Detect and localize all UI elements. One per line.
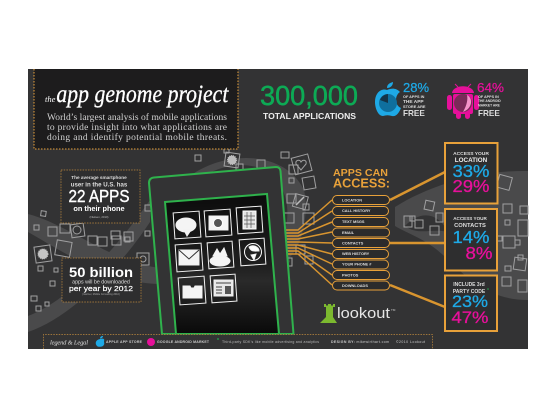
stat box: third party code: PARTY CODE — [453, 289, 486, 295]
heading: apps can access — [333, 167, 390, 190]
stat box: contacts: 8% — [466, 243, 492, 263]
callout: 50 billion — [62, 258, 141, 302]
stat: apple app store free: THE APP — [403, 99, 424, 105]
stat box: third party code — [445, 276, 497, 331]
callout: 22 apps: The average smartphone — [71, 175, 127, 180]
heading: apps can access: APPS CAN — [333, 167, 388, 179]
heading: apps can access: ACCESS: — [333, 176, 390, 190]
callout: 50 billion: 50 billion — [69, 264, 133, 280]
app icon grid — [173, 206, 266, 305]
stat box: location: LOCATION — [455, 157, 488, 164]
icon: folder — [178, 276, 206, 305]
callout: 22 apps — [61, 170, 140, 223]
stat box: contacts: ACCESS YOUR — [453, 216, 487, 221]
stat: apple app store free: 28% — [403, 81, 429, 95]
stat: total applications: 300,000 — [260, 80, 358, 111]
stat: apple app store free — [375, 81, 429, 118]
callout: 50 billion: per year by 2012 — [69, 284, 133, 293]
access list labels — [342, 198, 372, 288]
callout: 22 apps: on their phone — [73, 204, 125, 213]
footer: legend and legal: Third-party SDK’s like mobile advertising and analytics — [222, 340, 319, 344]
intro text — [47, 112, 227, 143]
stat: total applications: TOTAL APPLICATIONS — [263, 112, 357, 121]
stat box: location: ACCESS YOUR — [453, 151, 489, 157]
access list pills — [332, 196, 390, 290]
stat: android market free: FREE — [478, 109, 500, 118]
footer: legend and legal: GOOGLE ANDROID MARKET — [157, 340, 210, 344]
icon: mail — [175, 243, 203, 272]
callout: 50 billion: apps will be downloaded — [72, 280, 130, 286]
stat box: third party code: INCLUDE 3rd — [453, 282, 485, 288]
background: band cutout — [405, 215, 448, 232]
footer: legend and legal: APPLE APP STORE — [106, 340, 143, 344]
access list labels: CONTACTS — [342, 240, 364, 246]
callout: 50 billion: (Gartner, Mobile Consulting 2010) — [82, 293, 120, 296]
connectors: list to stat boxes — [390, 172, 445, 307]
access list labels: WEB HISTORY — [342, 251, 370, 256]
stat: android market free: THE ANDROID — [478, 99, 501, 103]
access list labels: PHOTOS — [342, 272, 359, 278]
intro text: doing and identify potential mobile threats. — [47, 132, 227, 143]
footer: legend and legal: legend & Legal — [50, 340, 88, 346]
icon: calculator — [236, 206, 263, 234]
stat box: location — [445, 143, 498, 204]
icon: legend android — [147, 338, 155, 346]
stat: android market free: 64% — [477, 81, 504, 95]
access list labels: EMAIL — [342, 230, 355, 235]
phone — [149, 167, 294, 334]
logo: lookout — [320, 304, 396, 323]
footer: legend and legal: ©2010 Lookout — [396, 340, 425, 344]
icon: chat — [173, 211, 201, 239]
stat box: third party code: 23% — [452, 292, 488, 311]
stat box: location: 29% — [452, 176, 490, 196]
stat: apple app store free: STORE ARE — [403, 104, 426, 109]
icon: newspaper — [210, 274, 237, 303]
footer: legend and legal — [44, 334, 432, 349]
access list labels: DOWNLOADS — [342, 283, 368, 288]
icon: tower — [320, 304, 337, 323]
logo: lookout: TM — [391, 308, 396, 312]
callout: 22 apps: 22 APPS — [68, 186, 130, 206]
icon: android — [447, 84, 479, 119]
access list labels: LOCATION — [342, 198, 362, 202]
icon: weather — [207, 241, 234, 269]
icon: globe — [239, 238, 266, 266]
stat box: location: 33% — [452, 161, 490, 181]
callout: 22 apps: user in the U.S. has — [71, 182, 128, 188]
footer: legend and legal: DESIGN BY: mikewirthart.com — [331, 340, 389, 344]
stat box: contacts: 14% — [452, 227, 490, 247]
stat: android market free — [447, 81, 504, 119]
access list labels: CALL HISTORY — [342, 208, 371, 213]
phone screen — [165, 194, 279, 334]
access list labels: YOUR PHONE # — [342, 262, 372, 266]
stat: android market free: MARKET ARE — [478, 104, 501, 108]
access list labels: TEXT MSGS — [342, 219, 365, 224]
title: theapp genome project — [45, 79, 229, 108]
logo: lookout: lookout — [337, 306, 390, 322]
stat box: contacts — [445, 209, 497, 270]
stat: apple app store free: OF APPS IN — [403, 95, 425, 99]
intro text: World’s largest analysis of mobile applications — [47, 112, 227, 123]
intro text: to provide insight into what applications are — [47, 123, 227, 133]
icon: legend apple — [96, 336, 104, 347]
stat box: third party code: 47% — [452, 308, 488, 327]
callout: 22 apps: (Nielsen, 2010) — [90, 215, 109, 219]
panel: title box — [34, 69, 238, 149]
background: DNA helix bands — [28, 158, 528, 332]
stat: android market free: OF APPS IN — [478, 95, 499, 99]
icon: apple — [375, 82, 401, 116]
stat: apple app store free: FREE — [403, 109, 425, 118]
panel: dark background — [28, 69, 528, 349]
icon: camera — [204, 209, 232, 237]
background: scattered app squares — [31, 148, 528, 311]
connectors: phone to access list — [286, 200, 332, 285]
stat box: contacts: CONTACTS — [454, 223, 486, 229]
